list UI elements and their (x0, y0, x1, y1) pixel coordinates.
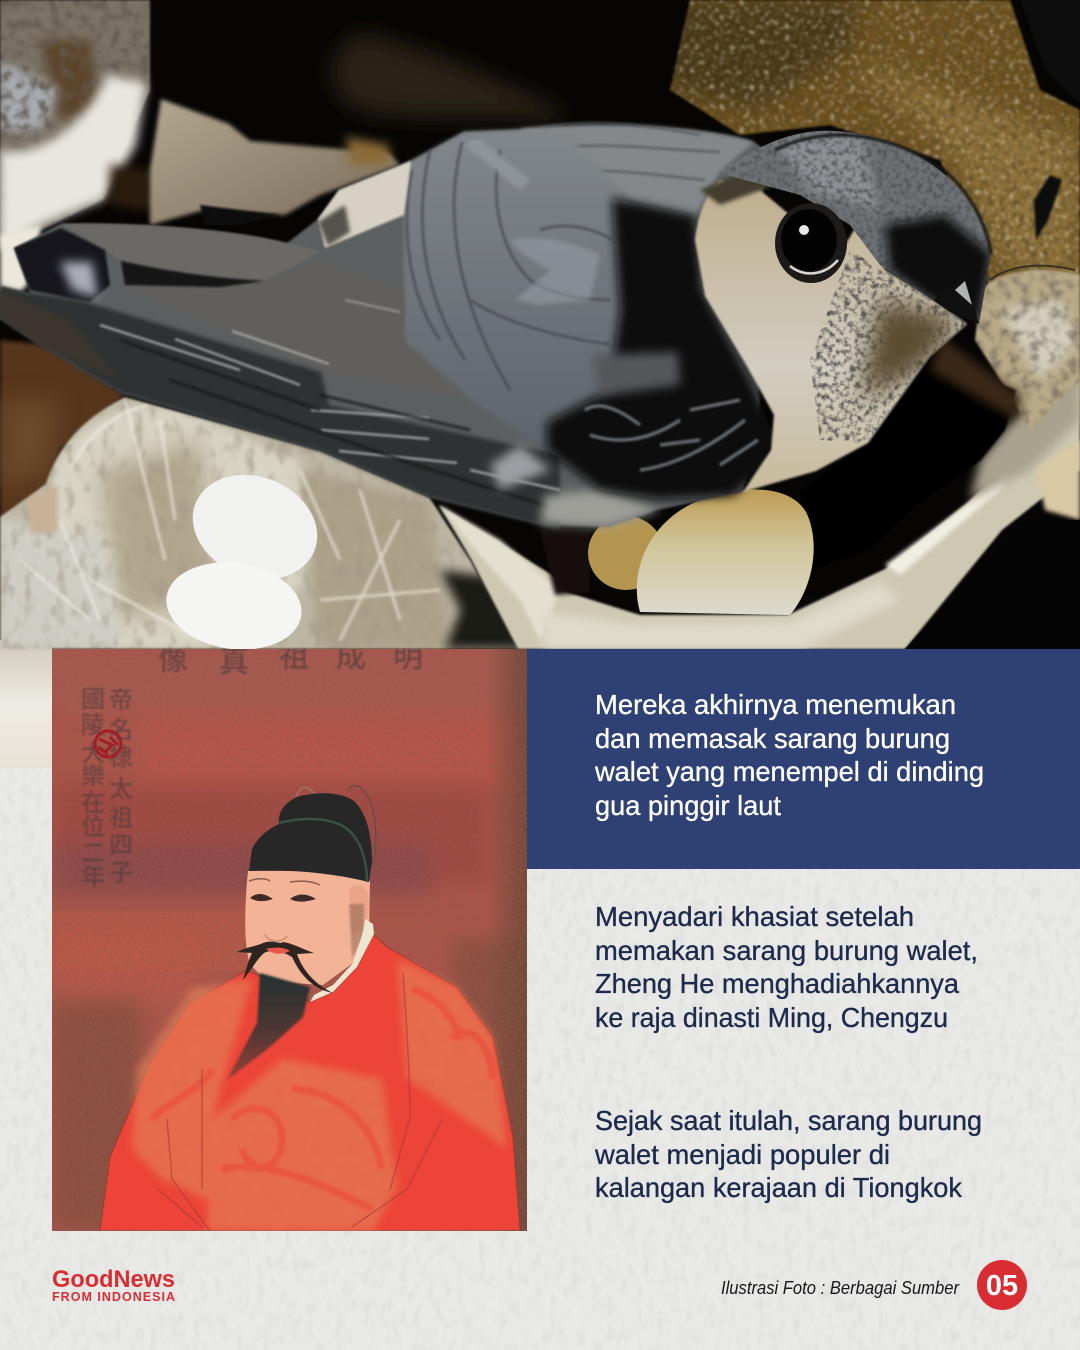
inscription: 年 (81, 857, 105, 892)
upper left rock and fluff (0, 0, 160, 300)
inscription: 名 (109, 710, 133, 745)
logo: GoodNews from Indonesia: FROM INDONESIA (52, 1290, 175, 1304)
feather highlights (100, 300, 560, 490)
inscription: 太 (109, 769, 133, 804)
photo: swiftlet on its nest with eggs (0, 0, 1080, 768)
red seal (95, 731, 121, 757)
inscription: 樂 (81, 756, 105, 791)
cream cheek (695, 160, 980, 492)
inscription: 在 (81, 783, 105, 818)
inscription: 大 (81, 733, 105, 768)
inscription: 子 (109, 853, 133, 888)
face (227, 871, 374, 1080)
text block: Zheng He: Menyadari khasiat setelah (595, 901, 914, 932)
eye (775, 203, 847, 283)
inscription: 二 (81, 833, 105, 868)
silk background (52, 649, 527, 1231)
robe (100, 934, 520, 1231)
portrait panel: Emperor Chengzu (52, 649, 527, 1231)
rock wall top right (660, 0, 1080, 400)
inscription (81, 632, 423, 892)
mid wing (121, 261, 464, 397)
text block: Zheng He: Zheng He menghadiahkannya (595, 968, 959, 999)
text block: navy panel copy: dan memasak sarang burung (595, 723, 950, 754)
text block: navy panel copy: Mereka akhirnya menemukan (595, 689, 956, 720)
dark primaries (0, 286, 560, 530)
gold eggs (588, 490, 814, 615)
mid rock (150, 99, 400, 225)
nest bowl right (439, 370, 1080, 649)
text block: popularity: walet menjadi populer di (595, 1139, 890, 1170)
moustache and beard (227, 973, 310, 1080)
lacy nest left (0, 380, 540, 650)
page number badge: 05 (986, 1270, 1018, 1302)
brown rock lower left (0, 340, 125, 520)
back feathers (520, 125, 754, 216)
inscription: 四 (109, 825, 133, 860)
inscription: 帝 (109, 680, 133, 715)
wing tip (14, 228, 110, 302)
bird body (0, 123, 774, 530)
beak (933, 275, 979, 324)
inscription: 位 (81, 807, 105, 842)
dark overhang streak (333, 33, 565, 124)
white eggs (161, 457, 333, 658)
inscription: 棣 (109, 737, 133, 772)
text block: Zheng He: ke raja dinasti Ming, Chengzu (595, 1002, 948, 1033)
head cap (719, 130, 994, 324)
black hat (249, 786, 376, 882)
page number badge (977, 1260, 1027, 1310)
text block: popularity: kalangan kerajaan di Tiongkok (595, 1172, 963, 1203)
text block: navy panel copy (595, 689, 984, 822)
white wing patch (318, 161, 411, 248)
dark nest pocket (540, 338, 1080, 649)
text block: Zheng He: memakan sarang burung walet, (595, 935, 978, 966)
photo strip left of the portrait (0, 640, 52, 768)
text block: Zheng He (595, 901, 978, 1034)
inscription: 國 (81, 679, 105, 714)
text block: popularity: Sejak saat itulah, sarang burung (595, 1105, 982, 1136)
upper tail feather (61, 224, 321, 281)
logo: GoodNews from Indonesia: GoodNews (52, 1266, 175, 1293)
panel: navy text box (527, 649, 1080, 869)
inscription: 陵 (81, 705, 105, 740)
text block: navy panel copy: gua pinggir laut (595, 790, 781, 821)
text block: popularity (595, 1105, 982, 1204)
rock right of the beak (974, 264, 1080, 520)
black shoulder (547, 198, 774, 499)
white feathers under the wing (490, 445, 550, 490)
wing coverts (404, 128, 630, 450)
inscription: 祖 (109, 798, 133, 833)
text block: navy panel copy: walet yang menempel di dinding (595, 756, 984, 787)
